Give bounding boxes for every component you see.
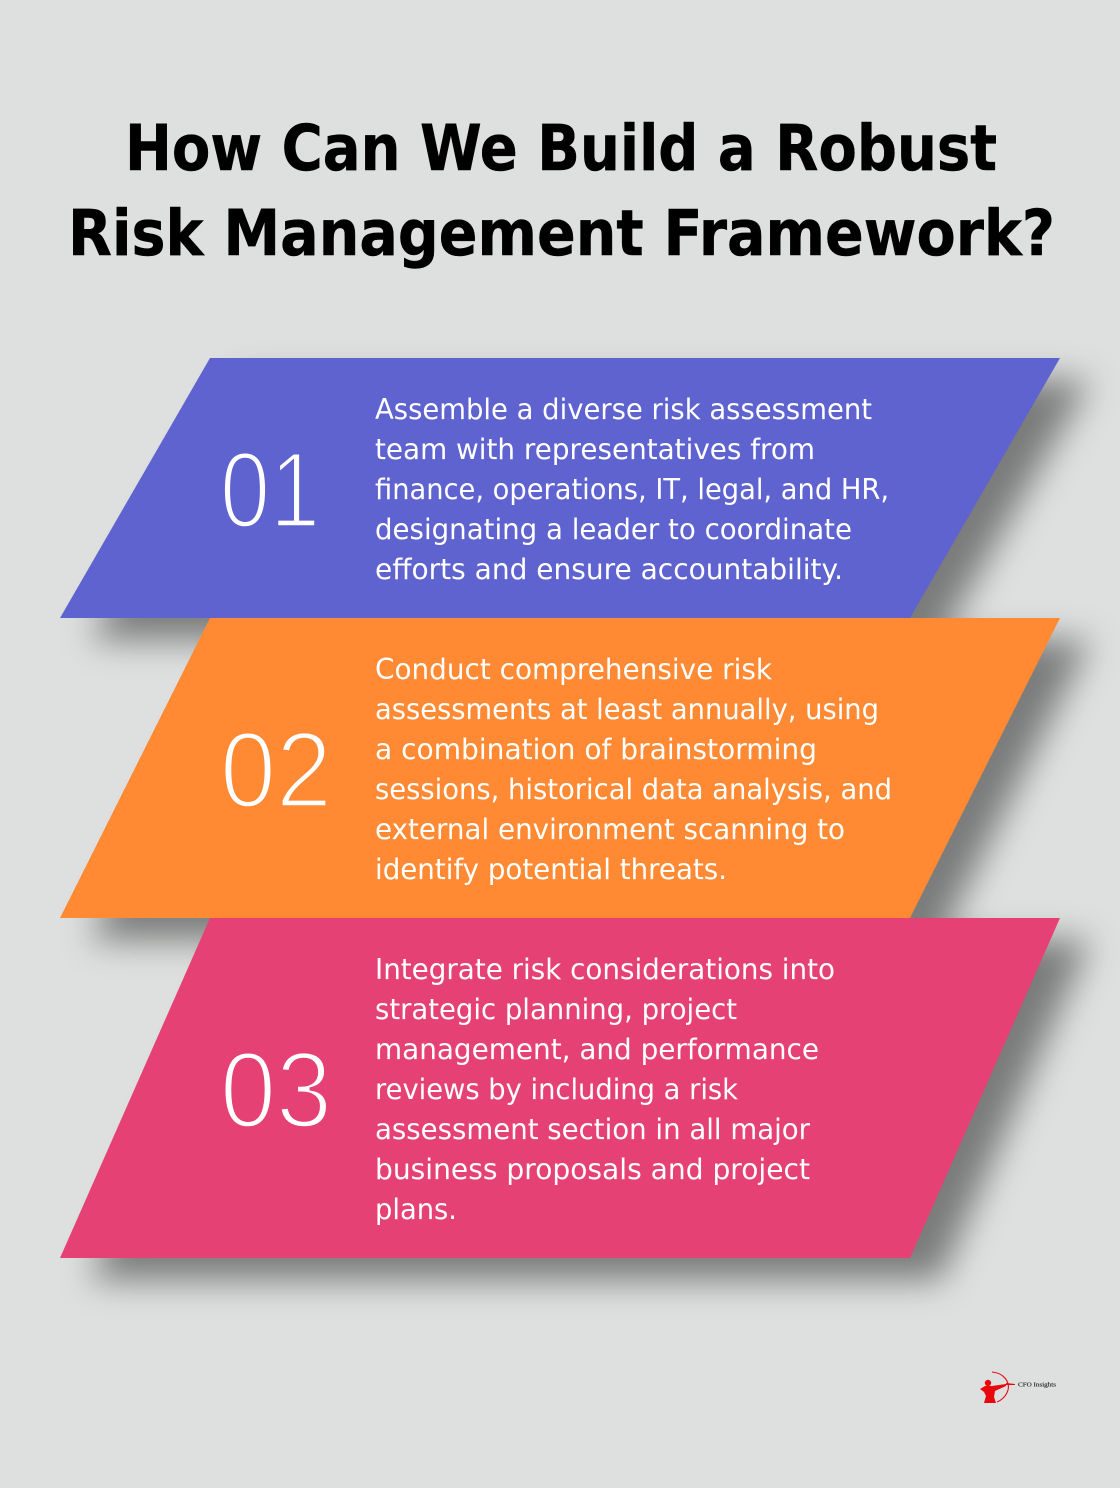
- text block: step 02: Conduct comprehensive risk: [375, 653, 772, 686]
- text block: step 03: Integrate risk considerations into: [375, 953, 835, 986]
- logo: CFO Insights: [980, 1372, 1057, 1403]
- panel shape: step 02: [60, 618, 1060, 918]
- title: [68, 112, 1055, 270]
- text block: step 02: [375, 653, 892, 886]
- text block: step 02: external environment scanning to: [375, 813, 845, 846]
- panel: step 02: [60, 618, 1060, 918]
- text block: step 03: assessment section in all major: [375, 1113, 810, 1146]
- text block: step 03: reviews by including a risk: [375, 1073, 738, 1106]
- panel shape: step 03: [60, 918, 1060, 1258]
- panel: step 03: [60, 918, 1060, 1258]
- text block: step 01: [375, 393, 889, 586]
- text block: step 01: efforts and ensure accountability.: [375, 553, 843, 586]
- text block: step 01: team with representatives from: [375, 433, 815, 466]
- text block: step 03: management, and performance: [375, 1033, 819, 1066]
- text block: step 03: [375, 953, 835, 1226]
- icon: red archer: [980, 1372, 1015, 1403]
- number 01: 01: [220, 429, 320, 550]
- text block: step 03: strategic planning, project: [375, 993, 737, 1026]
- text block: step 02: sessions, historical data analysis, and: [375, 773, 892, 806]
- text block: step 03: business proposals and project: [375, 1153, 810, 1186]
- number 02: 02: [220, 709, 332, 830]
- logo text: CFO Insights: [1018, 1382, 1057, 1388]
- text block: step 02: assessments at least annually, using: [375, 693, 879, 726]
- number 03: 03: [220, 1029, 332, 1150]
- text block: step 02: a combination of brainstorming: [375, 733, 817, 766]
- text block: step 03: plans.: [375, 1193, 457, 1226]
- text block: step 01: designating a leader to coordinate: [375, 513, 852, 546]
- panel: step 01: [60, 358, 1060, 618]
- text block: step 01: finance, operations, IT, legal, and HR,: [375, 473, 889, 506]
- text block: step 02: identify potential threats.: [375, 853, 727, 886]
- panel shape: step 01: [60, 358, 1060, 618]
- text block: step 01: Assemble a diverse risk assessment: [375, 393, 872, 426]
- title: How Can We Build a Robust: [125, 112, 997, 185]
